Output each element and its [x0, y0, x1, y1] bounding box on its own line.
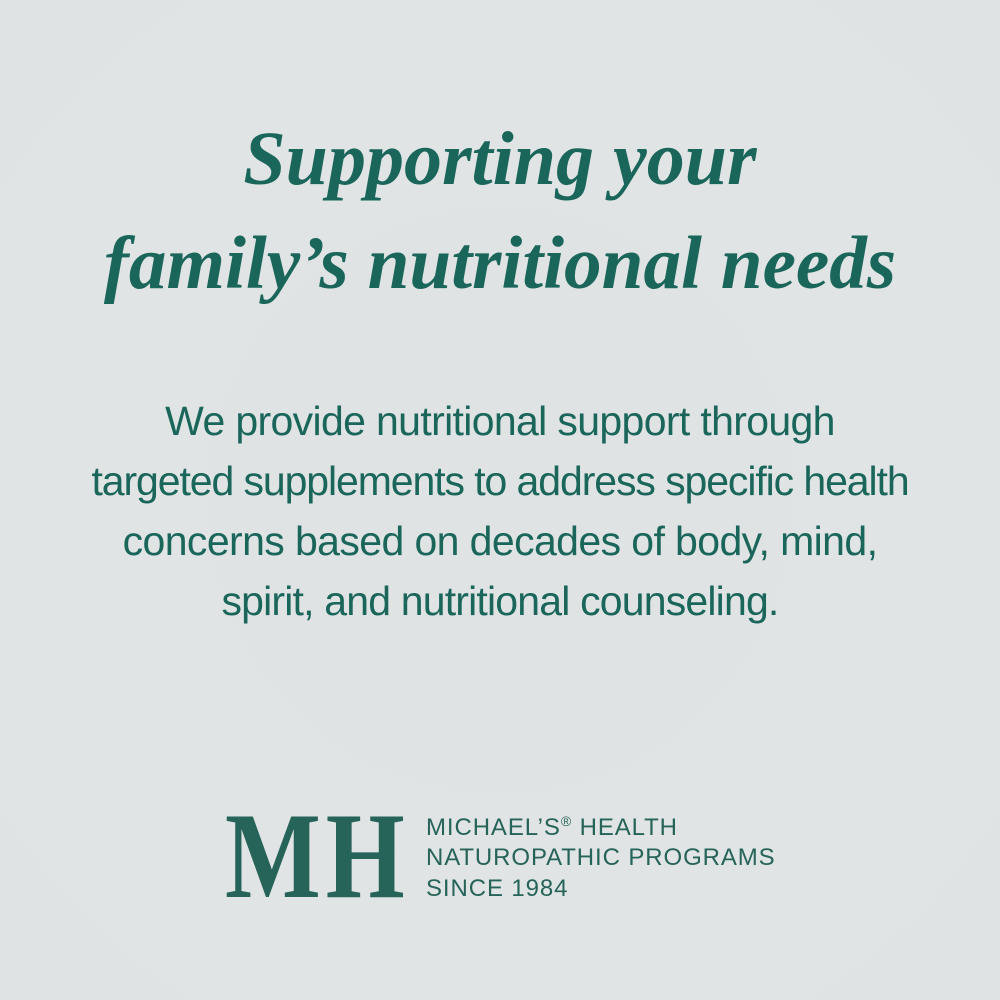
- logo text: [426, 813, 776, 902]
- title: Supporting your: [243, 117, 757, 201]
- body text: concerns based on decades of body, mind,: [123, 518, 877, 564]
- title: family’s nutritional needs: [104, 222, 896, 305]
- body text: targeted supplements to address specific health: [91, 458, 909, 504]
- logo text: NATUROPATHIC PROGRAMS: [426, 844, 776, 871]
- body text: We provide nutritional support through: [165, 398, 835, 444]
- logo: MH monogram: MH: [225, 787, 410, 924]
- body text: spirit, and nutritional counseling.: [221, 578, 779, 624]
- title: [104, 117, 896, 305]
- logo text: SINCE 1984: [426, 875, 568, 902]
- logo text: MICHAEL’S® HEALTH: [426, 813, 678, 841]
- body text: [91, 398, 909, 624]
